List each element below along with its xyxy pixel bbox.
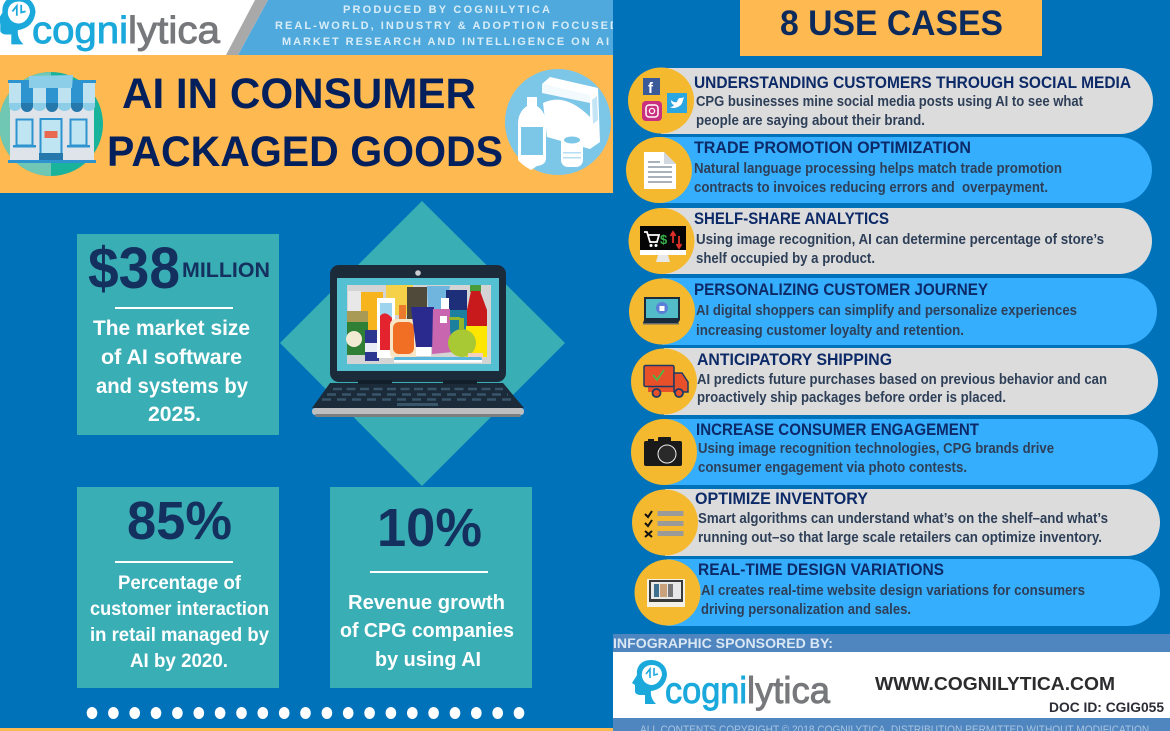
icon: website monitor xyxy=(647,579,685,607)
icon: packaged goods xyxy=(505,69,611,175)
use case 4: customer journey: increasing customer loyalty and retention. xyxy=(696,323,964,339)
use case 7: optimize inventory: Smart algorithms can understand what’s on the shelf–and what’s xyxy=(698,511,1108,527)
icon: monitor with cart xyxy=(640,226,686,262)
use case 8: real-time design: AI creates real-time website design variations for consumers xyxy=(701,583,1085,599)
header tagline: REAL-WORLD, INDUSTRY & ADOPTION FOCUSED xyxy=(275,20,620,32)
use case 5: anticipatory shipping xyxy=(631,348,1158,415)
title: PACKAGED GOODS xyxy=(107,128,503,176)
use case 4: customer journey xyxy=(629,278,1157,345)
stat value: $38 million: MILLION xyxy=(182,259,270,282)
stat description xyxy=(93,317,250,426)
icon: delivery truck xyxy=(644,366,688,397)
website url: WWW.COGNILYTICA.COM xyxy=(875,674,1115,694)
icon: checklist xyxy=(645,511,684,537)
heading: 8 use cases xyxy=(740,0,1042,56)
sponsor heading: INFOGRAPHIC SPONSORED BY: xyxy=(613,635,833,651)
icon: storefront xyxy=(0,72,103,176)
use case 1: social media: UNDERSTANDING CUSTOMERS THROUGH SOCIAL MEDIA xyxy=(694,74,1131,92)
use case 6: consumer engagement: Using image recognition technologies, CPG brands drive xyxy=(698,441,1054,457)
use case 8: real-time design: REAL-TIME DESIGN VARIATIONS xyxy=(698,561,944,579)
use case 7: optimize inventory: running out–so that large scale retailers can optimize inventory. xyxy=(698,530,1102,546)
use case 4: customer journey: AI digital shoppers can simplify and personalize experiences xyxy=(696,303,1077,319)
header tagline xyxy=(275,4,620,48)
use case 7: optimize inventory: OPTIMIZE INVENTORY xyxy=(695,490,868,508)
header tagline: MARKET RESEARCH AND INTELLIGENCE ON AI xyxy=(282,36,611,48)
use case 5: anticipatory shipping: AI predicts future purchases based on previous behavior and can xyxy=(697,372,1107,388)
use case 1: social media xyxy=(628,68,1153,134)
right column background xyxy=(613,0,1170,731)
diamond backdrop xyxy=(280,201,565,486)
use case 5: anticipatory shipping: ANTICIPATORY SHIPPING xyxy=(697,351,892,369)
heading: 8 use cases: 8 USE CASES xyxy=(780,4,1003,43)
stat value: 85%: 85% xyxy=(127,491,232,551)
use case 3: shelf-share analytics: SHELF-SHARE ANALYTICS xyxy=(694,210,889,228)
use case 6: consumer engagement xyxy=(631,419,1158,485)
title banner xyxy=(0,55,613,193)
dotted divider xyxy=(87,707,524,719)
stat description: 2025. xyxy=(148,403,201,426)
title: AI IN CONSUMER xyxy=(122,70,476,118)
stat card: customer interaction xyxy=(77,487,279,688)
stat card: revenue growth xyxy=(330,487,532,688)
stat description: Revenue growth xyxy=(348,592,505,614)
use case 8: real-time design: driving personalization and sales. xyxy=(701,602,911,618)
bottom orange strip xyxy=(0,728,613,731)
use case 6: consumer engagement: consumer engagement via photo contests. xyxy=(698,460,967,476)
logo: cognilytica footer xyxy=(632,660,830,711)
use case 4: customer journey: PERSONALIZING CUSTOMER JOURNEY xyxy=(694,281,988,299)
icon: social media: f xyxy=(648,80,654,97)
stat description xyxy=(340,592,514,671)
use case 3: shelf-share analytics: shelf occupied by a product. xyxy=(696,251,875,267)
stat description: customer interaction xyxy=(90,599,269,620)
stat description: by using AI xyxy=(375,649,481,671)
stat description xyxy=(90,573,269,672)
stat description: of AI software xyxy=(101,346,242,369)
logo: cognilytica header: lytica xyxy=(128,10,221,52)
use case 1: social media: CPG businesses mine social media posts using AI to see what xyxy=(696,94,1083,110)
stat description: AI by 2020. xyxy=(130,651,228,672)
stat description: of CPG companies xyxy=(340,620,514,642)
use case 2: trade promotion: Natural language processing helps match trade promotion xyxy=(694,161,1062,177)
icon: document xyxy=(644,152,676,189)
use case 2: trade promotion xyxy=(626,137,1152,203)
icon: monitor with cart: $ xyxy=(660,232,668,247)
logo: cognilytica header xyxy=(0,0,221,52)
icon: camera xyxy=(644,437,682,466)
use case 7: optimize inventory xyxy=(632,489,1160,556)
icon: social media xyxy=(642,78,687,121)
icon: laptop with products xyxy=(312,265,524,417)
header banner xyxy=(0,0,620,55)
title xyxy=(107,70,503,176)
laptop screen: products xyxy=(346,285,491,364)
icon: laptop like xyxy=(643,297,680,324)
use case 8: real-time design xyxy=(634,559,1160,626)
logo: cognilytica footer: cogni xyxy=(665,670,747,711)
document id: DOC ID: CGIG055 xyxy=(1049,700,1164,715)
stat value: 10%: 10% xyxy=(377,498,482,558)
sponsor footer xyxy=(613,634,1170,731)
use case 6: consumer engagement: INCREASE CONSUMER ENGAGEMENT xyxy=(696,421,979,439)
use case 1: social media: people are saying about their brand. xyxy=(696,113,925,129)
use case 3: shelf-share analytics: Using image recognition, AI can determine percentage of store’s xyxy=(696,232,1104,248)
logo: cognilytica header: cogni xyxy=(32,10,128,52)
logo: cognilytica footer: lytica xyxy=(747,670,830,711)
stat value: $38 million: $38 xyxy=(88,236,180,301)
use case 5: anticipatory shipping: proactively ship packages before order is placed. xyxy=(697,390,1006,406)
stat description: and systems by xyxy=(96,375,248,398)
use case 2: trade promotion: contracts to invoices reducing errors and overpayment. xyxy=(694,180,1048,196)
use case 2: trade promotion: TRADE PROMOTION OPTIMIZATION xyxy=(694,139,971,157)
use case 3: shelf-share analytics xyxy=(628,208,1152,274)
stat card: market size xyxy=(77,234,279,435)
stat value: $38 million xyxy=(88,236,270,301)
header tagline: PRODUCED BY COGNILYTICA xyxy=(343,4,552,16)
stat description: Percentage of xyxy=(118,573,242,594)
stat description: The market size xyxy=(93,317,250,340)
stat description: in retail managed by xyxy=(90,625,269,646)
